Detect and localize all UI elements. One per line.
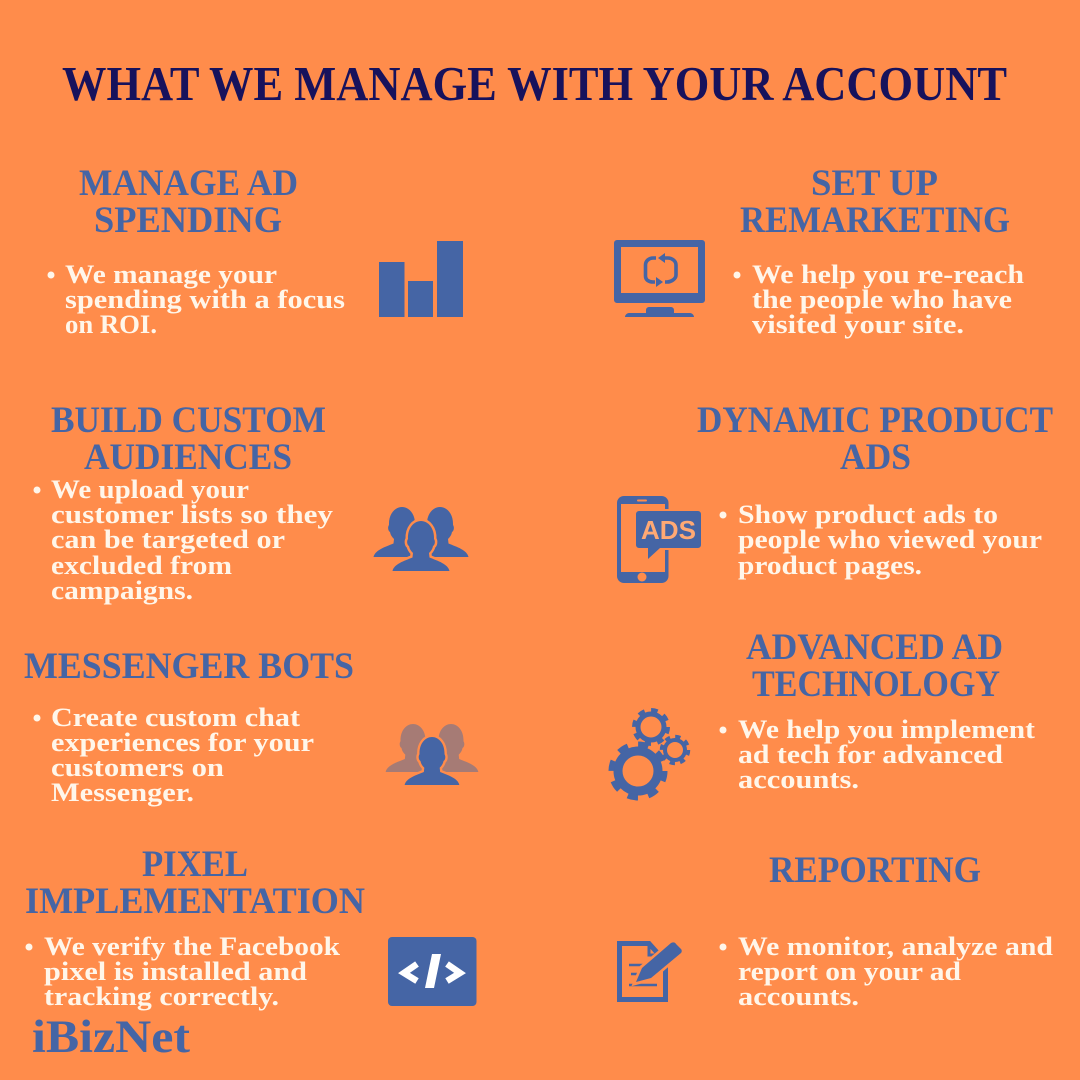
panel: set up remarketing: visited your site. [752, 309, 964, 339]
panel: advanced ad technology [720, 627, 1035, 794]
panel: reporting [720, 850, 1053, 1011]
panel: dynamic product ads: ADS [840, 437, 911, 478]
panel: build custom audiences: We upload your [51, 474, 249, 504]
panel: messenger bots: Messenger. [51, 777, 194, 807]
panel: set up remarketing: SET UP [811, 163, 938, 204]
panel: build custom audiences: excluded from [51, 550, 232, 580]
panel: pixel implementation: tracking correctly. [44, 981, 279, 1011]
icon: audience group [374, 507, 468, 571]
panel: manage ad spending: We manage your [65, 259, 277, 289]
panel: build custom audiences: AUDIENCES [84, 437, 292, 478]
panel: manage ad spending: MANAGE AD [79, 163, 298, 204]
panel: dynamic product ads: product pages. [738, 550, 922, 580]
panel: reporting: REPORTING [769, 850, 981, 891]
icon: code tag [388, 937, 476, 1006]
icon: phone with ads bubble: ADS [641, 515, 696, 545]
panel: pixel implementation: PIXEL [142, 844, 248, 885]
panel: build custom audiences: campaigns. [51, 575, 193, 605]
panel: pixel implementation: IMPLEMENTATION [25, 881, 365, 922]
panel: build custom audiences [34, 400, 333, 605]
panel: pixel implementation: pixel is installed and [44, 956, 307, 986]
icon: report document with pen [620, 941, 683, 1000]
panel: dynamic product ads: DYNAMIC PRODUCT [697, 400, 1053, 441]
panel: pixel implementation [25, 844, 365, 1011]
title: WHAT WE MANAGE WITH YOUR ACCOUNT [62, 56, 1007, 111]
panel: dynamic product ads: people who viewed your [738, 524, 1042, 554]
panel: manage ad spending [48, 163, 345, 339]
logo: iBizNet: iBizNet [32, 1011, 190, 1063]
icon: chat users [386, 724, 478, 785]
panel: advanced ad technology: ADVANCED AD [746, 627, 1003, 668]
panel: advanced ad technology: TECHNOLOGY [752, 664, 1000, 705]
panel: build custom audiences: customer lists so they [51, 499, 333, 529]
panel: set up remarketing: We help you re-reach [752, 259, 1024, 289]
panel: set up remarketing: REMARKETING [740, 200, 1010, 241]
panel: messenger bots: MESSENGER BOTS [24, 646, 354, 687]
panel: set up remarketing: the people who have [752, 284, 1012, 314]
panel: manage ad spending: SPENDING [94, 200, 282, 241]
panel: messenger bots: Create custom chat [51, 702, 300, 732]
icon: gears [612, 710, 688, 798]
icon: bar chart [379, 241, 463, 317]
panel: advanced ad technology: We help you implement [738, 714, 1035, 744]
panel: messenger bots: customers on [51, 752, 224, 782]
panel: reporting: We monitor, analyze and [738, 931, 1053, 961]
panel: manage ad spending: spending with a focus [65, 284, 345, 314]
panel: dynamic product ads [697, 400, 1053, 580]
panel: set up remarketing [734, 163, 1024, 339]
panel: reporting: report on your ad [738, 956, 961, 986]
panel: dynamic product ads: Show product ads to [738, 499, 998, 529]
panel: messenger bots: experiences for your [51, 727, 314, 757]
icon: phone with ads bubble [617, 496, 701, 583]
panel: reporting: accounts. [738, 981, 859, 1011]
panel: advanced ad technology: ad tech for advanced [738, 739, 1003, 769]
panel: build custom audiences: BUILD CUSTOM [51, 400, 326, 441]
panel: advanced ad technology: accounts. [738, 764, 859, 794]
icon: monitor with refresh arrows [614, 240, 705, 317]
panel: manage ad spending: on ROI. [65, 309, 157, 339]
panel: messenger bots [24, 646, 354, 807]
panel: pixel implementation: We verify the Facebook [44, 931, 340, 961]
panel: build custom audiences: can be targeted or [51, 524, 285, 554]
